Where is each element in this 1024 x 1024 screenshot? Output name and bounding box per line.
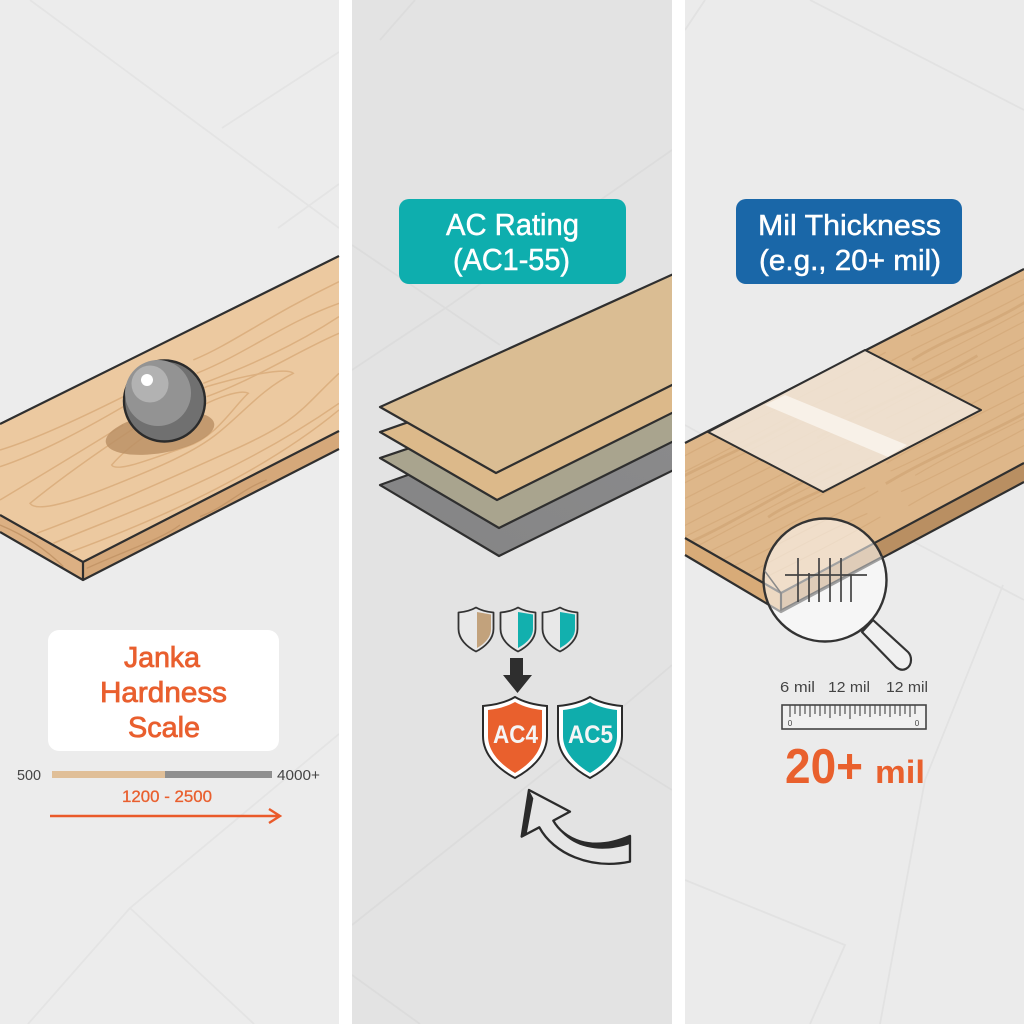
layer: backing: [378, 443, 672, 558]
text: typical range: 1200 - 2500: [122, 787, 212, 806]
chart: hardness range bar: [17, 768, 320, 784]
text: 20+ mil callout: mil: [875, 754, 925, 790]
diagram: laminate layers: [378, 274, 672, 558]
icon: AC5 shield: AC5: [568, 721, 613, 749]
labels: layer thicknesses: 6 mil: [780, 680, 815, 696]
arrow: curved upgrade arrow: [522, 790, 630, 864]
wear layer: translucent sheet: [708, 350, 981, 492]
icon: tan shield: [458, 608, 494, 652]
label: AC rating: AC Rating: [446, 207, 579, 242]
plank: oak with wear layer: [684, 268, 1024, 614]
magnifier handle: [862, 620, 911, 670]
text: 20+ mil callout: 20+: [785, 740, 863, 794]
label: AC rating: [399, 199, 626, 284]
label: Janka hardness scale: Janka: [124, 642, 201, 674]
arrow: down to AC4: [503, 658, 532, 693]
magnifier lens: [764, 518, 886, 642]
layer: decor: [378, 386, 672, 502]
ball shadow: [102, 404, 218, 462]
labels: layer thicknesses: 12 mil: [886, 680, 928, 696]
plank: wood with grain: [0, 256, 339, 580]
icon: teal shield: [500, 608, 536, 652]
wood grain: [685, 278, 1024, 580]
layer: core: [378, 414, 672, 530]
labels: layer thicknesses: [780, 680, 928, 696]
icon: AC5 shield: [558, 697, 622, 778]
layer: wear surface: [378, 274, 672, 474]
label: mil thickness: [736, 199, 962, 284]
icon: AC4 shield: AC4: [493, 721, 538, 749]
icon: teal shield: [542, 608, 578, 652]
label: Janka hardness scale: Hardness: [100, 677, 227, 709]
icon: ruler: [782, 705, 926, 729]
label: Janka hardness scale: [48, 630, 279, 751]
label: mil thickness: (e.g., 20+ mil): [759, 245, 941, 277]
icon: ruler: 0: [788, 719, 793, 728]
panel: mil thickness background: [685, 0, 1024, 1024]
chart: hardness range bar: 500: [17, 768, 41, 784]
labels: layer thicknesses: 12 mil: [828, 680, 870, 696]
chart: hardness range bar: 4000+: [277, 768, 320, 784]
panel: Janka hardness background: [0, 0, 339, 1024]
icon: magnifying glass: [764, 518, 911, 670]
icons: small shields: [458, 608, 578, 652]
icon: AC4 shield: [483, 697, 547, 778]
wood grain lines: [0, 282, 339, 553]
arrow: range direction: [50, 809, 280, 823]
label: mil thickness: Mil Thickness: [758, 210, 941, 242]
label: Janka hardness scale: Scale: [128, 712, 200, 744]
thickness tick marks: [785, 558, 867, 602]
label: AC rating: (AC1-55): [453, 242, 570, 277]
icon: ruler: 0: [915, 719, 920, 728]
text: 20+ mil callout: [785, 740, 925, 794]
icon: steel ball: [124, 360, 205, 442]
panel: AC rating background: [352, 0, 672, 1024]
